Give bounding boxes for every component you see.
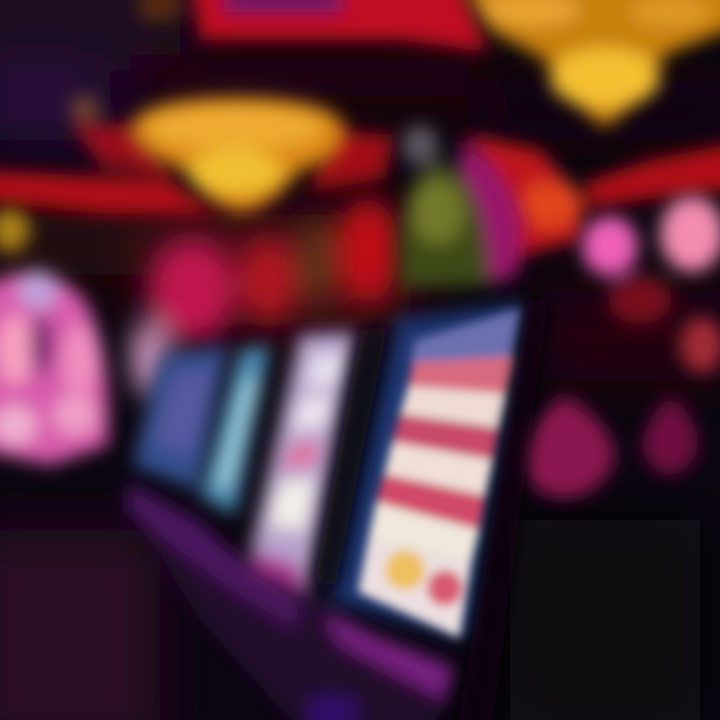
pink lights [582,196,720,373]
ceiling lamp left [130,97,345,212]
right red beam [470,135,720,260]
screen 2 [200,345,270,515]
screen 4 frame [330,302,525,640]
bags [518,395,698,498]
left red beam [0,96,395,215]
screen 3 [250,332,356,595]
screen 1 [133,345,228,490]
left pink machine [0,270,109,465]
machine tops [132,198,398,396]
machine shadows [315,300,548,720]
sign topper [400,125,524,288]
top red band [140,0,488,52]
screen 4 striped display [358,308,522,638]
chandelier right [460,0,720,128]
small left lamp [0,208,30,252]
machine cabinets [120,482,455,720]
